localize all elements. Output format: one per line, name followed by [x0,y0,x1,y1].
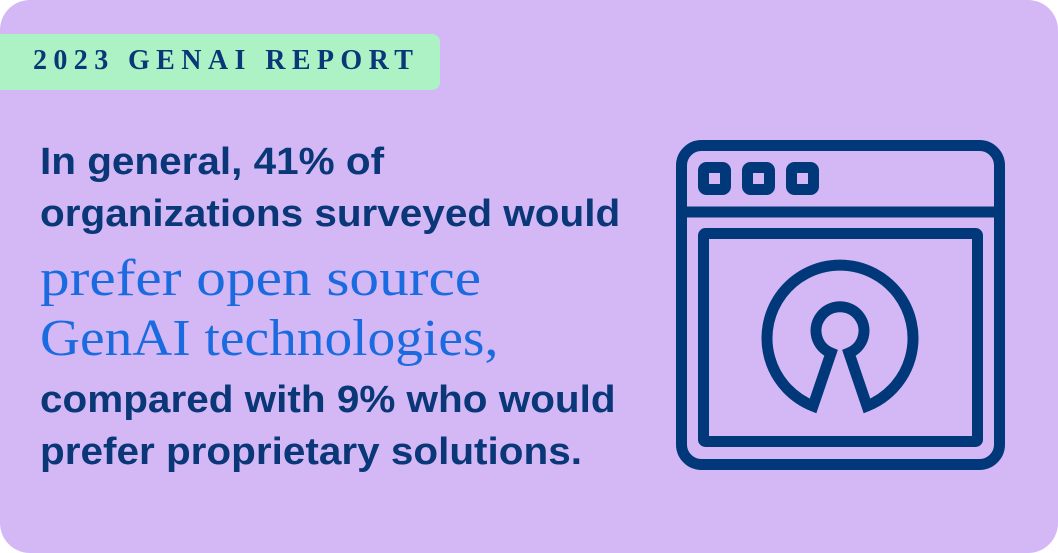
text: organizations surveyed would [40,193,620,235]
badge: 2023 GenAI report: 2023 GENAI REPORT [33,45,419,76]
text: compared with 9% who would [40,379,616,421]
badge: 2023 GenAI report [0,34,440,90]
text: In general, 41% of [40,141,384,183]
text: GenAI technologies, [40,310,498,367]
text: prefer open source [40,250,481,307]
text: prefer proprietary solutions. [40,431,582,473]
text block: statistic [40,141,620,473]
